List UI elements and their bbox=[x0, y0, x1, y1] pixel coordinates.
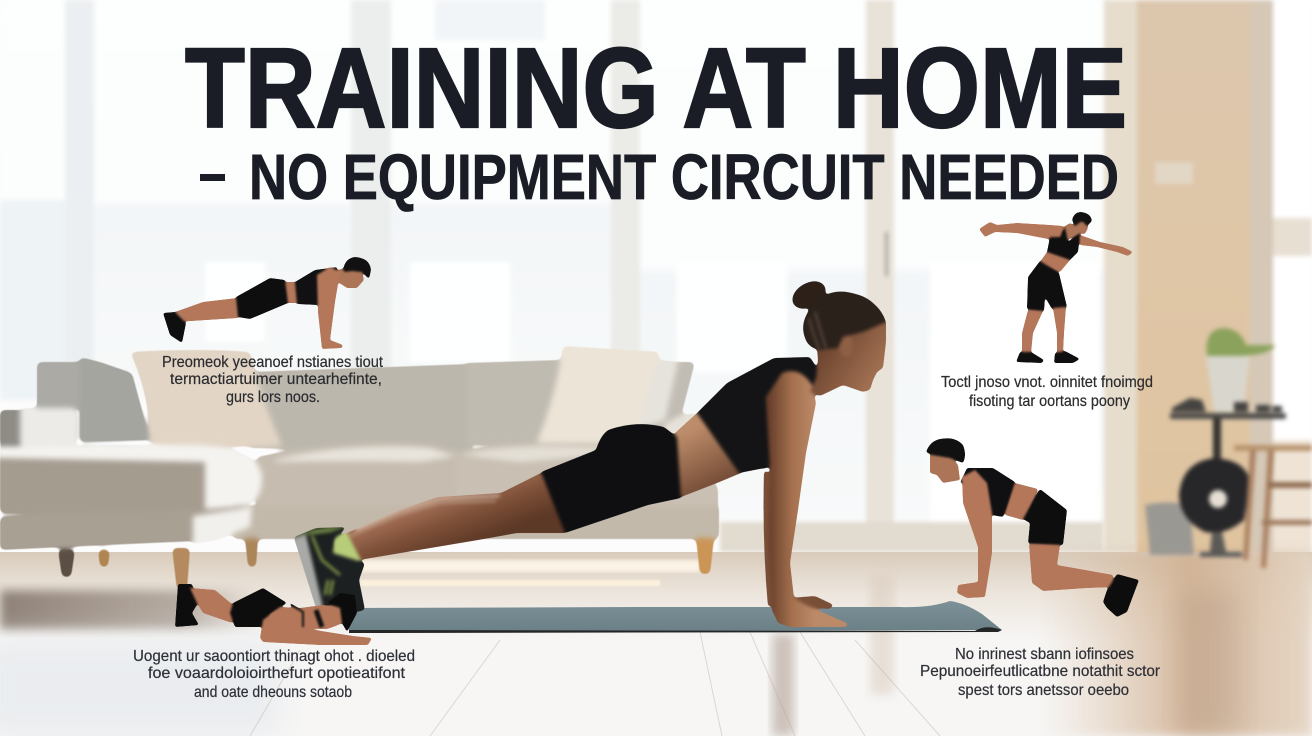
caption: arms out lean: fisoting tar oortans poony bbox=[969, 393, 1130, 410]
top bbox=[697, 357, 818, 473]
main figure: woman holding plank bbox=[294, 276, 886, 627]
leg bbox=[347, 473, 565, 560]
caption: plank bbox=[162, 354, 383, 406]
heading line one: TRAINING AT HOME bbox=[185, 25, 1127, 151]
caption: lying stretch: foe voaardoloioirthefurt opotieatifont bbox=[148, 665, 406, 682]
window panes bbox=[0, 0, 1106, 552]
near arm bbox=[766, 371, 849, 627]
caption: kneeling: spest tors anetssor oeebo bbox=[958, 682, 1129, 699]
caption: plank: termactiartuimer untearhefinte, bbox=[170, 371, 382, 388]
sofa bbox=[0, 346, 719, 590]
exercise: plank, top left bbox=[163, 257, 371, 349]
heading line two: NO EQUIPMENT CIRCUIT NEEDED bbox=[249, 141, 1119, 213]
caption: kneeling: Pepunoeirfeutlicatbne notathit sctor bbox=[920, 663, 1161, 680]
side furniture with plant bbox=[1145, 328, 1312, 568]
far arm bbox=[764, 470, 834, 612]
exercise: lying stretch, bottom left bbox=[175, 584, 372, 645]
torso skin bbox=[675, 413, 741, 497]
neck and face bbox=[810, 322, 886, 396]
caption: plank: gurs lors noos. bbox=[226, 389, 320, 406]
title bbox=[185, 25, 1127, 213]
caption: kneeling: No inrinest sbann iofinsoes bbox=[955, 646, 1134, 663]
exercise: kneeling, bottom right bbox=[926, 438, 1139, 617]
caption: kneeling bbox=[920, 646, 1161, 699]
ear bbox=[839, 333, 853, 357]
caption: lying stretch: Uogent ur saoontiort thinagt ohot . dioeled bbox=[133, 648, 415, 665]
wall and far window bbox=[1104, 0, 1312, 556]
caption: plank: Preomeok yeeanoef nstianes tiout bbox=[162, 354, 383, 371]
floor bbox=[0, 552, 1312, 736]
sock bbox=[333, 533, 361, 562]
caption: lying stretch: and oate dheouns sotaob bbox=[194, 684, 352, 701]
caption: arms out lean bbox=[941, 374, 1153, 410]
caption: lying stretch bbox=[133, 648, 415, 701]
shorts bbox=[541, 424, 681, 533]
exercise: arms out lean, top right bbox=[979, 212, 1133, 363]
caption: arms out lean: Toctl jnoso vnot. oinnitet fnoimgd bbox=[941, 374, 1153, 391]
hair with bun bbox=[787, 276, 886, 350]
shoe bbox=[294, 527, 365, 617]
yoga mat bbox=[349, 601, 1002, 633]
